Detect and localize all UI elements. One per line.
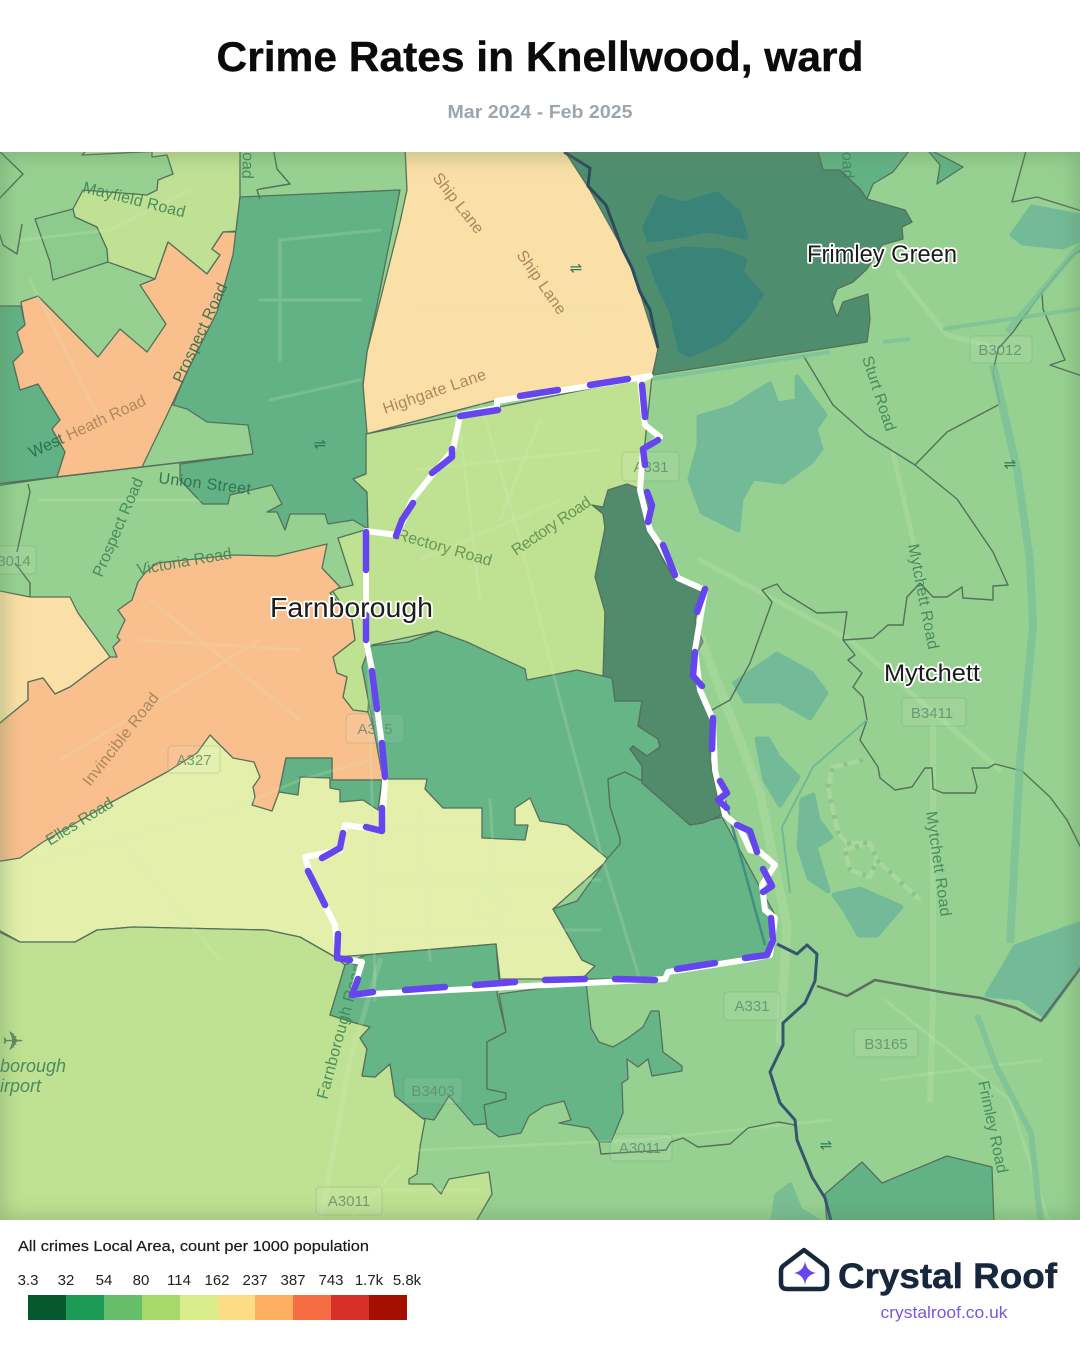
road and place labels: Union Street: [158, 470, 252, 498]
station icons: ⇌: [1004, 455, 1017, 473]
road and place labels: oad: [238, 152, 256, 179]
legend tick labels: 1.7k: [355, 1272, 384, 1289]
road and place labels: Ship Lane: [429, 170, 487, 237]
road and place labels: irport: [0, 1076, 42, 1096]
station icons: ⇌: [570, 259, 583, 277]
edge vignette: [0, 146, 1080, 1226]
road and place labels: Mytchett Road: [922, 810, 954, 918]
legend colour bar: [28, 1295, 407, 1320]
road network: [0, 190, 1050, 1225]
choropleth map: B3012: [978, 342, 1022, 359]
website link text: crystalroof.co.uk: [880, 1304, 1008, 1322]
ward boundary white line: [305, 376, 775, 995]
wordmark: Crystal Roof: [838, 1257, 1057, 1296]
legend tick labels: 3.3: [18, 1272, 38, 1289]
icon: airport plane: ✈: [2, 1027, 24, 1057]
choropleth map: A3011: [328, 1193, 370, 1210]
rivers and canal: [564, 152, 1080, 1225]
legend tick labels: 80: [133, 1272, 149, 1289]
choropleth map: A3011: [619, 1140, 661, 1157]
place label: Farnborough: Farnborough: [270, 592, 433, 623]
road and place labels: Farnborough Road: [314, 961, 367, 1101]
boundary lines: [0, 147, 1080, 1154]
ward boundary purple dashes: [308, 379, 773, 995]
legend: [18, 1238, 422, 1320]
station icons: ⇌: [314, 435, 327, 453]
choropleth map: A331: [633, 459, 669, 476]
road and place labels: Ship Lane: [513, 248, 569, 318]
legend tick labels: 237: [242, 1272, 268, 1289]
icon: house with star: [781, 1250, 827, 1289]
road and place labels: Victoria Road: [136, 546, 233, 579]
road and place labels: Highgate Lane: [381, 367, 489, 418]
legend title: All crimes Local Area, count per 1000 population: [18, 1238, 369, 1255]
choropleth map: B3403: [411, 1083, 455, 1100]
road and place labels: Mayfield Road: [81, 179, 187, 221]
neighbourhood areas: [0, 147, 994, 1225]
road and place labels: Prospect Road: [90, 475, 147, 580]
legend tick labels: 5.8k: [393, 1272, 422, 1289]
subtitle: date range: Mar 2024 - Feb 2025: [448, 102, 632, 122]
place label: Mytchett: Mytchett: [884, 660, 980, 687]
legend tick labels: 32: [58, 1272, 74, 1289]
road and place labels: Rectory Road: [395, 527, 494, 570]
road and place labels: Sturt Road: [858, 354, 898, 433]
road and place labels: oad: [838, 152, 856, 179]
road and place labels: Rectory Road: [509, 494, 595, 559]
title: Crime Rates in Knellwood, ward: [216, 33, 864, 80]
road and place labels: West Heath Road: [27, 393, 149, 462]
logo: Crystal Roof: [781, 1250, 1057, 1322]
road and place labels: Invincible Road: [80, 690, 163, 789]
choropleth map: A331: [734, 998, 770, 1015]
station icons: [314, 259, 1017, 1154]
road and place labels: Prospect Road: [170, 281, 231, 386]
legend tick labels: 114: [167, 1272, 191, 1289]
choropleth map: A325: [357, 721, 393, 738]
road and place labels: Elles Road: [43, 795, 117, 849]
choropleth map: [0, 146, 1080, 1226]
legend tick labels: 387: [280, 1272, 306, 1289]
place label: Frimley Green: Frimley Green: [807, 241, 957, 268]
choropleth map: A327: [176, 752, 212, 769]
lakes: [645, 194, 1080, 1225]
road and place labels: Frimley Road: [974, 1079, 1010, 1175]
road and place labels: Mytchett Road: [904, 543, 941, 651]
legend tick labels: 743: [318, 1272, 344, 1289]
choropleth map: B3165: [864, 1036, 908, 1053]
ward boundary: Knellwood: [305, 376, 775, 995]
legend tick labels: [18, 1272, 422, 1289]
legend tick labels: 162: [204, 1272, 230, 1289]
road shields: [0, 336, 1032, 1215]
legend tick labels: 54: [96, 1272, 112, 1289]
thick boundary lines: [817, 962, 1080, 1021]
map base: [0, 152, 1080, 1220]
station icons: ⇌: [820, 1136, 833, 1154]
road and place labels: [0, 152, 1010, 1175]
road and place labels: borough: [0, 1056, 66, 1076]
choropleth map: B3411: [911, 705, 953, 722]
